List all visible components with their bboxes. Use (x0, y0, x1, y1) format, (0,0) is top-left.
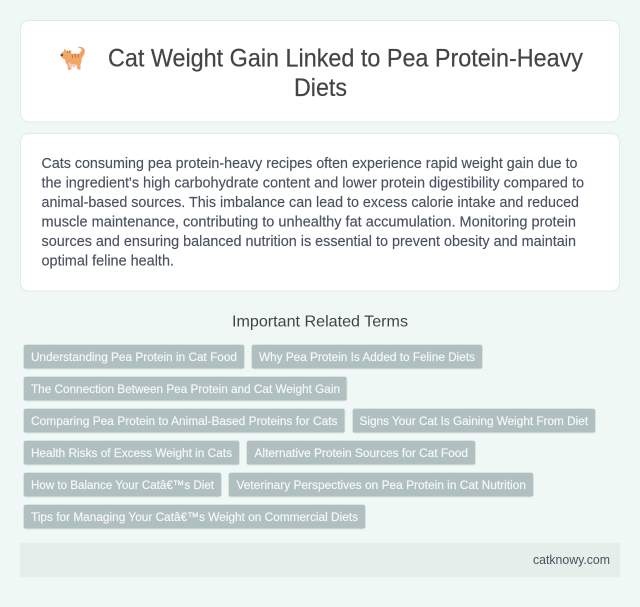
tag: Tips for Managing Your Catâ€™s Weight on Commercial Diets (31, 510, 358, 524)
tag (24, 376, 347, 401)
tag: Why Pea Protein Is Added to Feline Diets (259, 350, 475, 364)
footer bar (20, 543, 620, 577)
tag (24, 408, 345, 433)
summary paragraph: animal-based sources. This imbalance can lead to excess calorie intake and reduced (42, 195, 579, 211)
tag (24, 472, 222, 497)
tag: Comparing Pea Protein to Animal-Based Proteins for Cats (31, 414, 338, 428)
summary paragraph: the ingredient's high carbohydrate content and lower protein digestibility compared to (42, 176, 584, 192)
summary paragraph: optimal feline health. (42, 254, 174, 270)
title: Diets (294, 74, 347, 102)
tag (252, 344, 482, 369)
tag (24, 440, 240, 465)
tag: Signs Your Cat Is Gaining Weight From Diet (360, 414, 589, 428)
tag (352, 408, 596, 433)
icon: cat (60, 47, 85, 70)
tag: Health Risks of Excess Weight in Cats (31, 446, 232, 460)
summary paragraph: Cats consuming pea protein-heavy recipes often experience rapid weight gain due to (42, 156, 578, 172)
tag: Veterinary Perspectives on Pea Protein in Cat Nutrition (236, 478, 526, 492)
heading: related terms: Important Related Terms (232, 314, 408, 330)
panel: summary text card (20, 134, 620, 291)
tag: Understanding Pea Protein in Cat Food (31, 350, 237, 364)
tag (24, 504, 366, 529)
tag: The Connection Between Pea Protein and Cat Weight Gain (31, 382, 340, 396)
tag (246, 440, 476, 465)
footer source text: catknowy.com (533, 553, 610, 567)
tag: How to Balance Your Catâ€™s Diet (31, 478, 215, 492)
summary paragraph: sources and ensuring balanced nutrition is essential to prevent obesity and maintain (42, 234, 576, 250)
tag (228, 472, 534, 497)
title (108, 44, 583, 102)
related terms tags (24, 344, 596, 529)
summary paragraph (42, 156, 584, 270)
summary paragraph: muscle maintenance, contributing to unhealthy fat accumulation. Monitoring protein (42, 214, 576, 230)
title: Cat Weight Gain Linked to Pea Protein-Heavy (108, 44, 583, 72)
panel: title card (20, 20, 620, 122)
tag (24, 344, 244, 369)
tag: Alternative Protein Sources for Cat Food (254, 446, 468, 460)
